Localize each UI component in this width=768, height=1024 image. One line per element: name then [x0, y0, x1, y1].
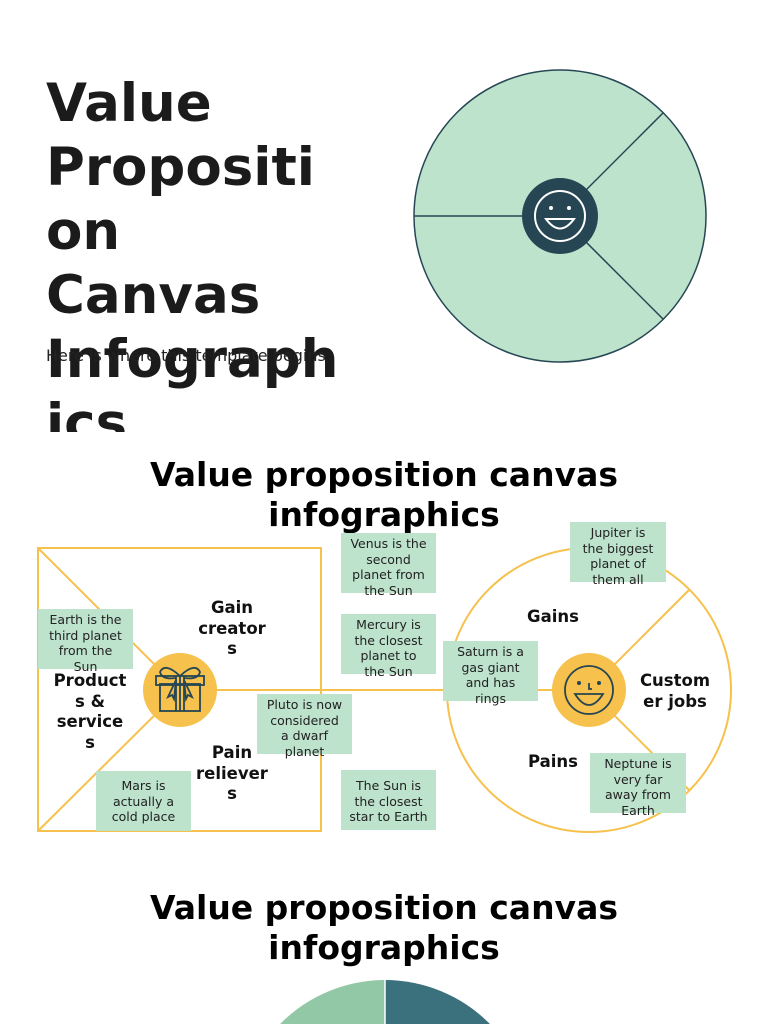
box: pluto: Pluto is now	[267, 697, 342, 712]
label: pain relievers: Pain	[212, 743, 252, 762]
icon: gift	[143, 653, 217, 727]
label: customer jobs: Custom	[640, 671, 710, 690]
label: gains: Gains	[527, 607, 579, 626]
label: products & services	[54, 671, 126, 752]
box: mercury: the Sun	[364, 664, 413, 678]
box: pluto: considered	[270, 712, 339, 728]
box: mercury: Mercury is	[356, 617, 421, 632]
box: saturn: and has	[466, 675, 515, 690]
box: jupiter: them all	[592, 572, 644, 586]
bottom pie chart	[280, 980, 490, 1024]
box: saturn: gas giant	[462, 660, 519, 674]
label: products & services: s	[85, 732, 95, 752]
section heading 2	[150, 888, 618, 967]
box: pluto: a dwarf	[281, 728, 328, 743]
box: pluto: planet	[285, 744, 324, 758]
label: pain relievers: s	[227, 784, 237, 803]
box: mercury: the closest	[354, 632, 423, 648]
section heading 2: infographics	[268, 928, 500, 967]
box: venus: planet from	[352, 567, 425, 582]
label: products & services: Product	[54, 671, 126, 690]
box: earth: third planet	[49, 628, 122, 642]
box: jupiter: planet of	[590, 556, 646, 571]
box: mars: cold place	[112, 809, 175, 824]
box: sun	[341, 770, 436, 830]
box: venus: second	[366, 552, 411, 566]
box: neptune: away from	[605, 787, 671, 802]
box: saturn: rings	[475, 690, 506, 706]
box: earth: Earth is the	[50, 612, 121, 627]
icon: smiley	[552, 653, 626, 727]
box: venus: the Sun	[364, 582, 413, 598]
box: jupiter: Jupiter is	[591, 525, 645, 540]
box: neptune: very far	[614, 772, 662, 786]
section heading 1: Value proposition canvas	[150, 455, 618, 494]
box: pluto	[257, 694, 352, 754]
box: sun: The Sun is	[356, 778, 421, 793]
box: venus	[341, 533, 436, 593]
section heading 2: Value proposition canvas	[150, 888, 618, 927]
subtitle: Here is where this template begins	[46, 346, 326, 365]
box: neptune	[590, 753, 686, 813]
box: saturn	[443, 641, 538, 701]
label: products & services: service	[57, 712, 123, 731]
box: mars: Mars is	[121, 778, 166, 793]
box: neptune: Earth	[621, 802, 655, 818]
label: pain relievers: reliever	[196, 764, 268, 782]
box: earth: Sun	[74, 658, 97, 674]
top circle diagram	[413, 69, 707, 363]
label: gain creators	[198, 598, 266, 658]
label: pain relievers	[196, 743, 268, 803]
label: customer jobs: er jobs	[643, 692, 707, 710]
label: gain creators: s	[227, 639, 237, 658]
box: earth: from the	[59, 643, 112, 658]
box: jupiter: the biggest	[583, 540, 653, 556]
label: gain creators: Gain	[211, 598, 253, 617]
label: gain creators: creator	[198, 618, 266, 638]
box: mars	[96, 771, 191, 831]
box: mercury	[341, 614, 436, 674]
box: neptune: Neptune is	[604, 756, 672, 771]
section heading 1: infographics	[268, 495, 500, 534]
box: sun: star to Earth	[349, 809, 428, 824]
section heading 1	[150, 455, 618, 534]
label: pains: Pains	[528, 752, 578, 771]
box: mercury: planet to	[360, 648, 417, 663]
box: saturn: Saturn is a	[457, 644, 524, 659]
box: sun: the closest	[354, 794, 423, 808]
box: mars: actually a	[113, 794, 174, 808]
box: jupiter	[570, 522, 666, 582]
box: earth	[38, 609, 133, 669]
box: venus: Venus is the	[350, 536, 427, 551]
label: customer jobs	[640, 671, 710, 710]
label: products & services: s &	[75, 692, 105, 710]
